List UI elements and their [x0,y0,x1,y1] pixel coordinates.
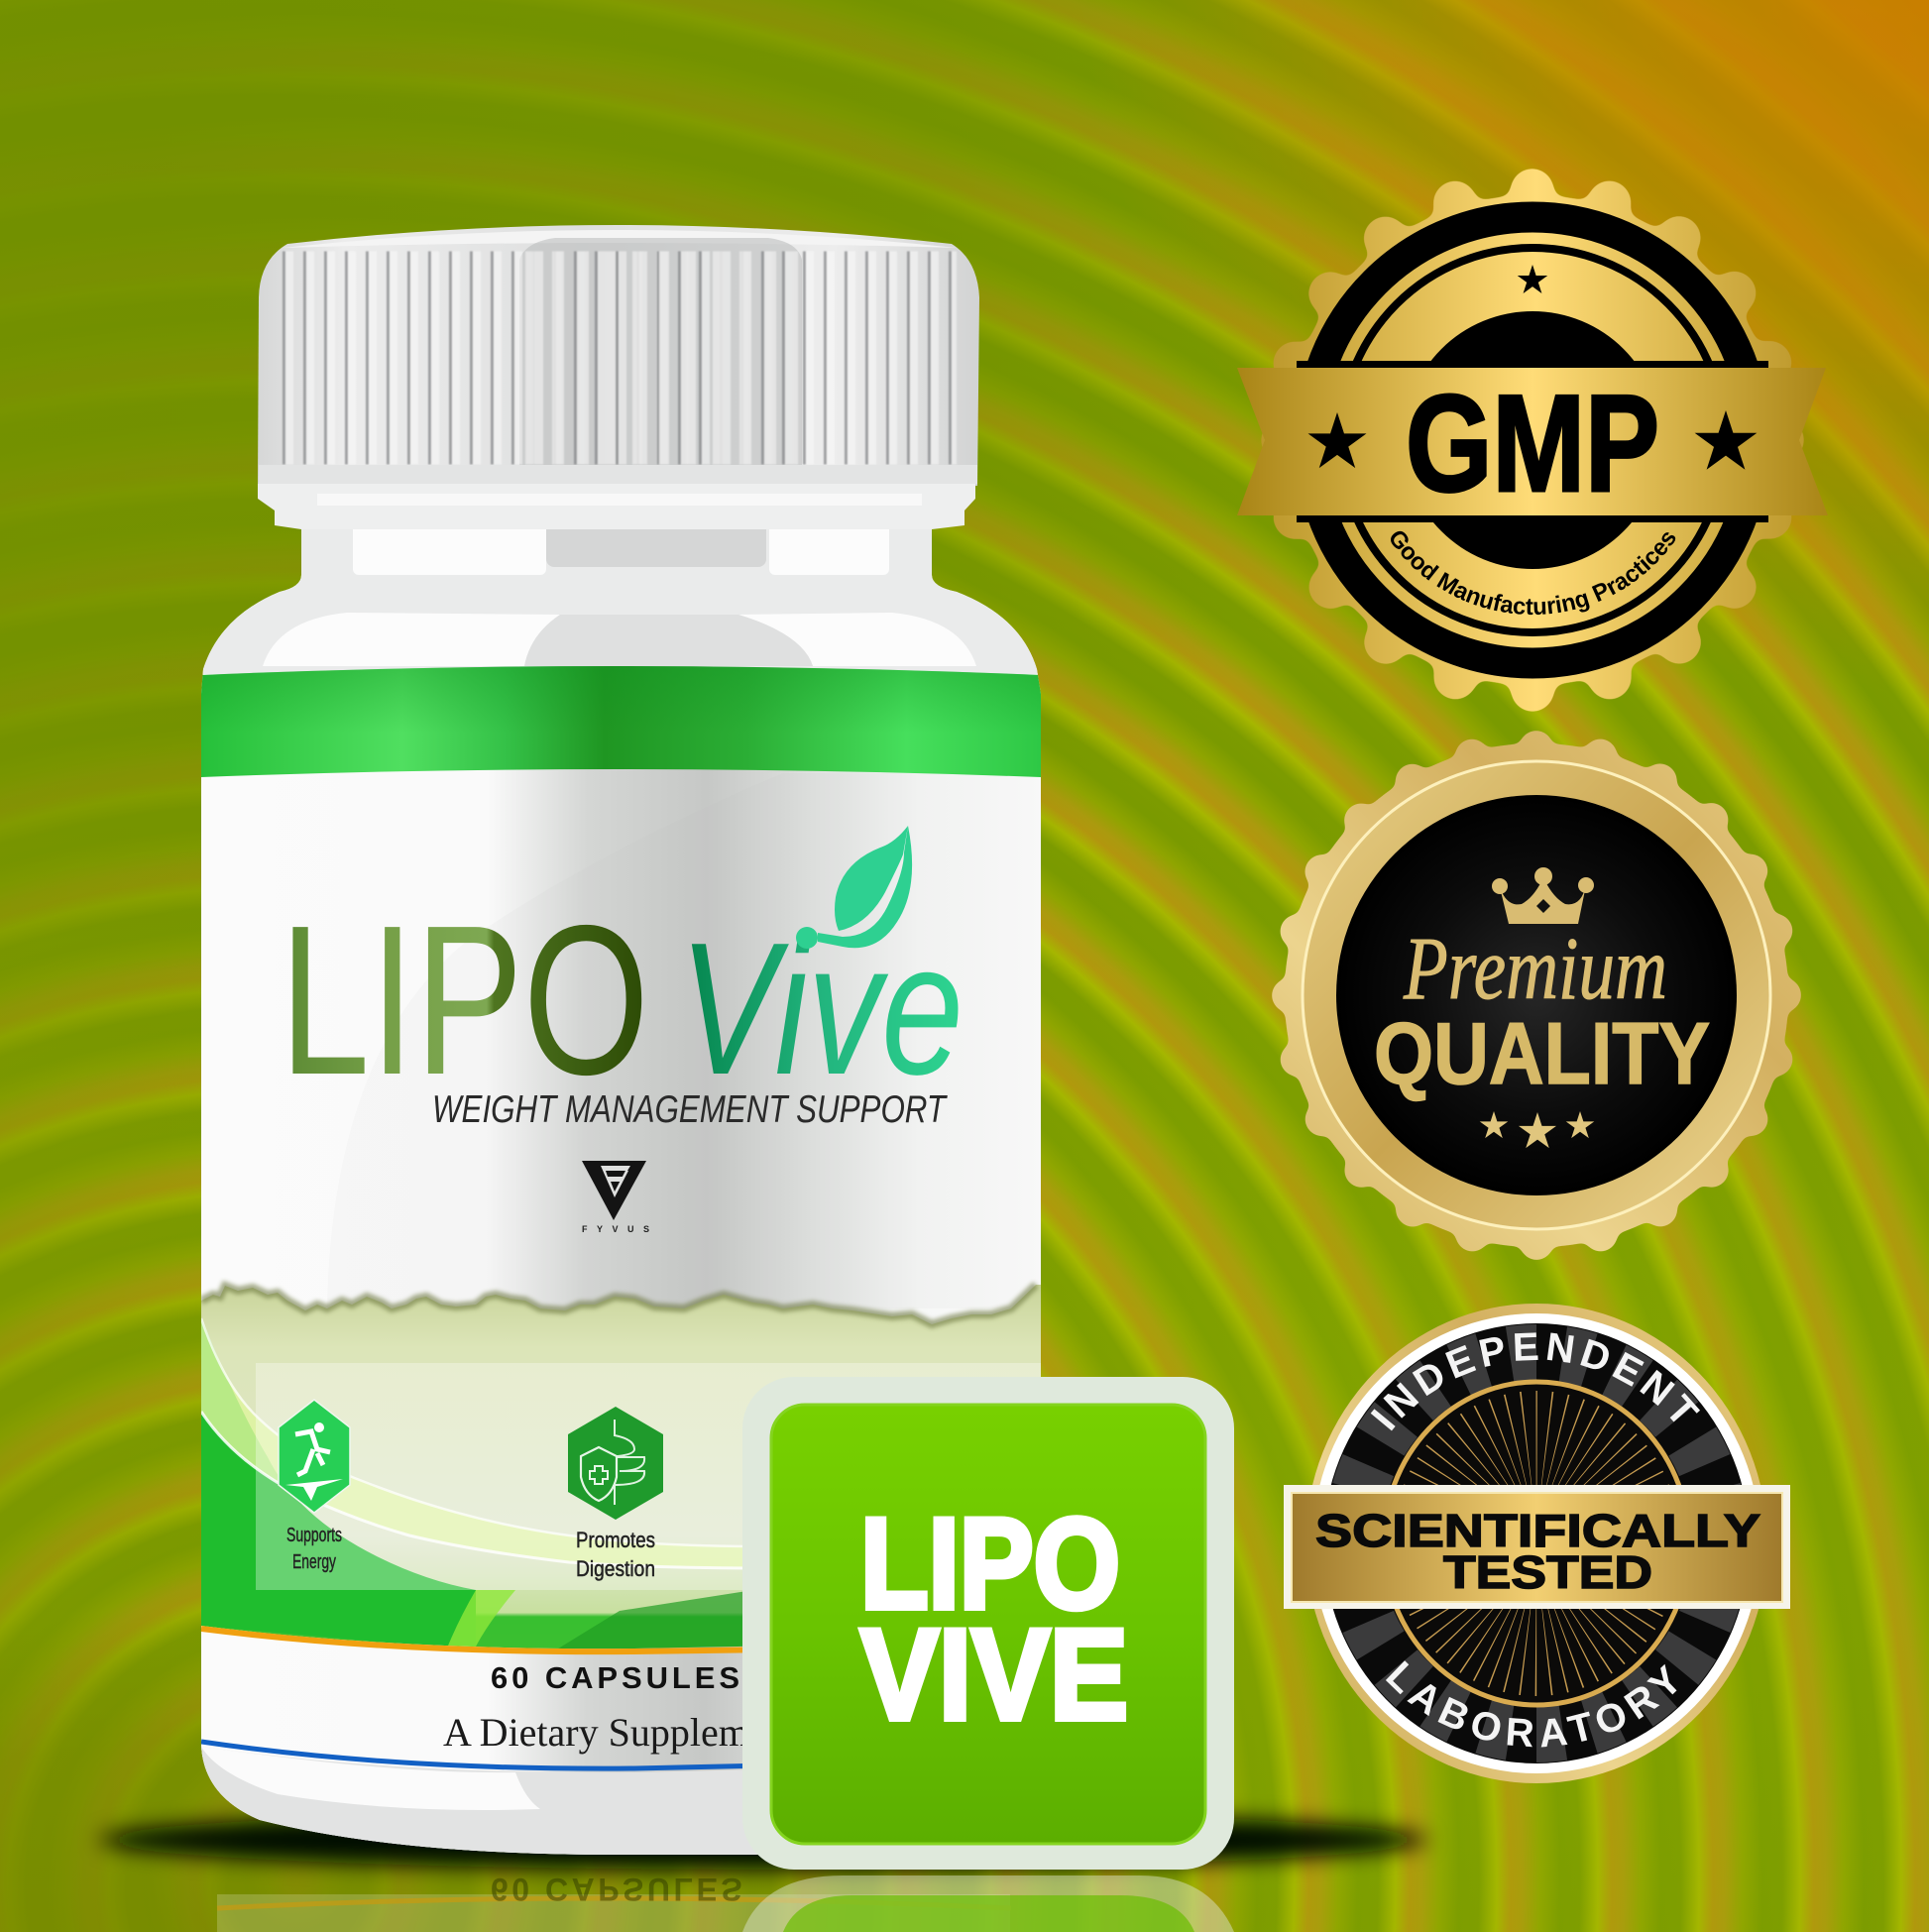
tile green inset [771,1405,1205,1844]
product bottle [198,225,1049,1864]
label: supports energy [286,1525,342,1573]
premium gold rim [1319,778,1754,1212]
label: supports energy: Energy [292,1551,336,1573]
badge: premium quality [1229,694,1844,1308]
GMP black ring [1309,217,1756,663]
icon: promotes digestion [568,1407,663,1520]
floor shadow [99,1810,1427,1870]
tile text: VIVE: VIVE [860,1602,1128,1747]
lower green label area [201,1279,1041,1649]
GMP left star [1308,412,1366,468]
capsule count: 60 CAPSULES [491,1660,739,1695]
lab inner disc [1384,1382,1689,1705]
GMP ribbon [1237,368,1828,515]
premium script text: Premium [1403,920,1667,1018]
bottle cap [258,225,979,529]
bottle body [198,486,1049,1864]
blue stripe [201,1739,742,1771]
GMP top star [1518,265,1547,293]
lab ribbon white [1284,1485,1790,1609]
dietary supplement line: A Dietary Supplement [443,1710,798,1755]
GMP scalloped gold seal [1190,129,1883,753]
orange stripe [201,1626,742,1655]
icon: supports energy [279,1400,350,1513]
GMP centre dome [1404,311,1661,569]
lab sun rays [1442,1440,1631,1647]
premium three stars [1480,1111,1594,1148]
lab ribbon title 2: TESTED [1443,1546,1652,1598]
icon: leaf [796,826,912,949]
label: promotes digestion: Promotes [576,1528,655,1552]
neck and shoulder highlights [202,529,1038,674]
label swoosh shading [327,773,1041,1308]
premium scalloped seal [1229,694,1844,1308]
badge: independent laboratory [1284,1304,1790,1783]
lab gold rim [1305,1304,1767,1783]
GMP thin ring [1340,248,1725,632]
translucent icon panel [256,1363,1049,1590]
white lower section [201,1626,742,1855]
badge: GMP [1237,169,1828,712]
quality text: QUALITY [1374,1004,1710,1102]
lab white ring [1312,1313,1760,1773]
label: promotes digestion [576,1528,655,1581]
green label band [201,666,1041,777]
tile text: LIPO: LIPO [860,1491,1120,1636]
logo: Vive: Vive [679,904,964,1114]
brand mark: Fyvus: FYVUS [582,1224,649,1234]
premium black disc [1336,795,1737,1195]
bottom base shading [201,1748,757,1855]
bottle reflection [217,1872,1234,1932]
GMP right star [1695,410,1757,470]
label: promotes digestion: Digestion [576,1556,655,1581]
premium rim highlight [1303,761,1770,1229]
lab independent text: INDEPENDENT [1370,1332,1700,1431]
lab laboratory text: LABORATORY [1386,1660,1677,1747]
bottle reflection: 60 CAPSULES [491,1872,745,1907]
square logo tile [742,1377,1234,1870]
brand mark: Fyvus [582,1161,649,1234]
logo: LIPO: LIPO [280,880,649,1119]
GMP curved caption: Good Manufacturing Practices [1391,531,1675,615]
GMP black edge strips [1297,361,1768,522]
tagline: WEIGHT MANAGEMENT SUPPORT [432,1088,949,1131]
icon: crown [1492,867,1594,924]
lab centre cover [1487,1489,1586,1598]
GMP title: GMP [1406,367,1659,520]
lab black ring [1323,1323,1750,1763]
label: supports energy: Supports [286,1525,342,1546]
lab ribbon title 1: SCIENTIFICALLY [1315,1505,1760,1556]
lab ring segments [1352,1352,1721,1735]
lab ribbon gold [1292,1493,1782,1602]
